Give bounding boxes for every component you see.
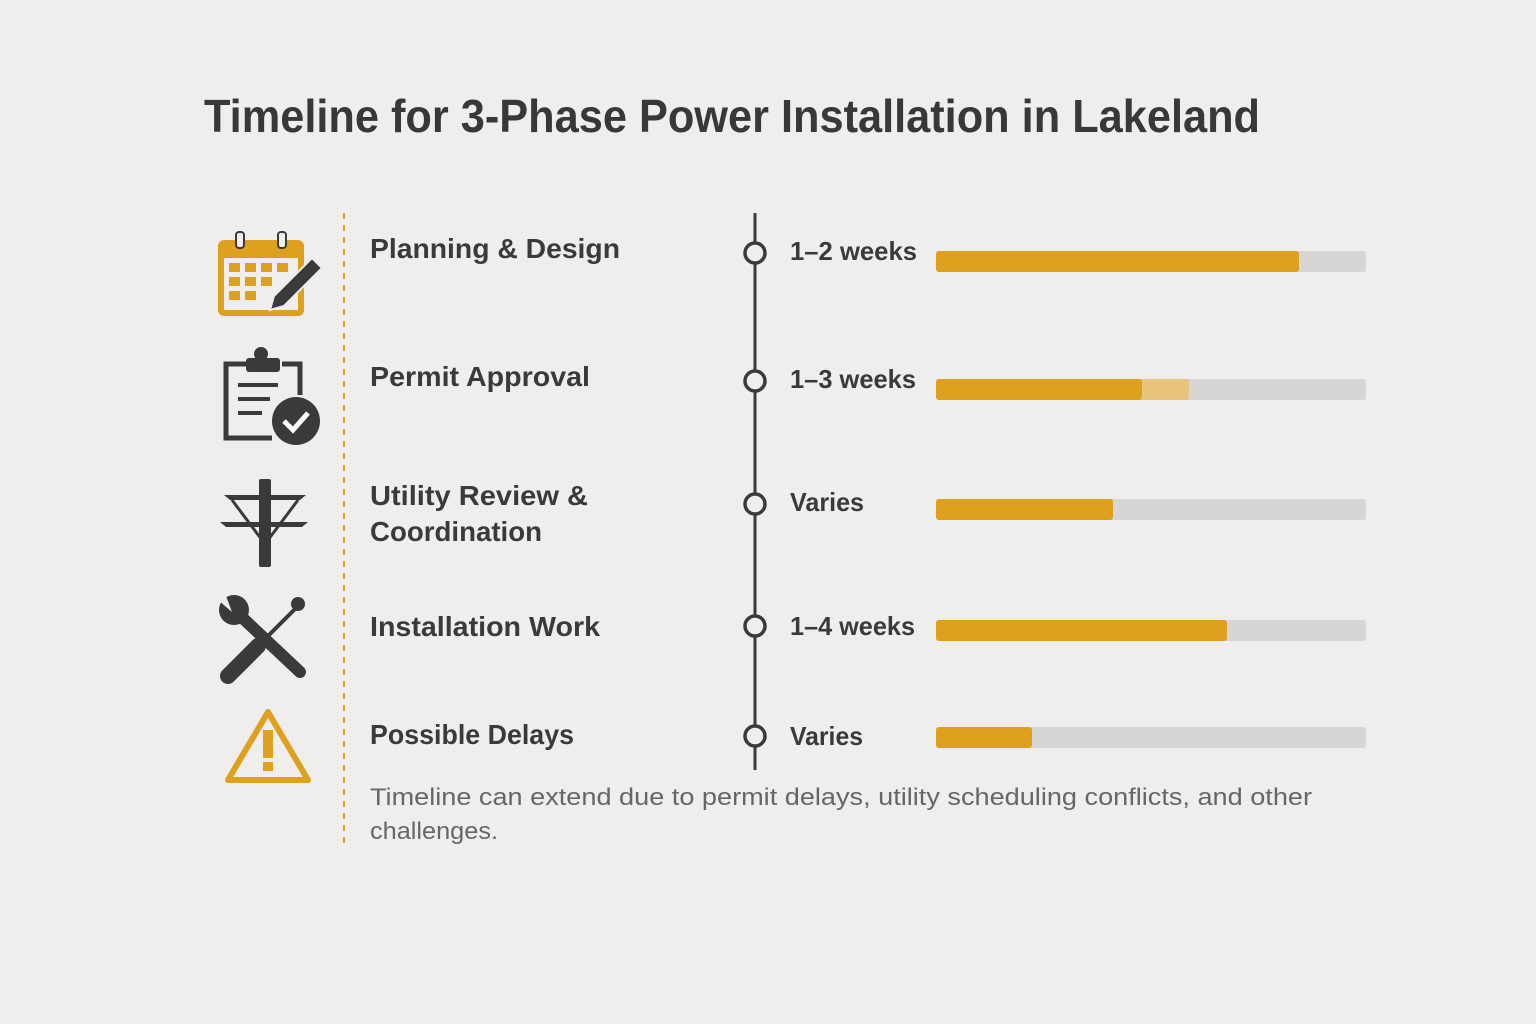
durations: 1–3 weeks xyxy=(790,364,916,394)
durations: 1–2 weeks xyxy=(790,236,917,266)
step labels xyxy=(370,233,620,750)
icon: tools xyxy=(218,595,305,676)
footnote: Timeline can extend due to permit delays, utility scheduling conflicts, and other xyxy=(370,784,1312,811)
durations: Varies xyxy=(790,721,863,751)
step labels: Possible Delays xyxy=(370,719,574,750)
step labels: Utility Review & xyxy=(370,480,588,511)
footnote: challenges. xyxy=(370,818,498,845)
footnote xyxy=(370,784,1312,845)
step labels: Permit Approval xyxy=(370,361,590,392)
durations: 1–4 weeks xyxy=(790,611,915,641)
icon: utility pole xyxy=(220,479,308,567)
step labels: Installation Work xyxy=(370,611,600,642)
durations xyxy=(790,236,917,751)
durations: Varies xyxy=(790,487,864,517)
step labels: Planning & Design xyxy=(370,233,620,264)
icon: calendar xyxy=(218,232,322,316)
bar chart xyxy=(936,251,1366,748)
step labels: Coordination xyxy=(370,516,542,547)
title: Timeline for 3-Phase Power Installation in Lakeland xyxy=(204,90,1260,142)
timeline axis xyxy=(745,213,765,770)
icon: clipboard check xyxy=(226,347,320,445)
icon: warning xyxy=(228,712,308,780)
